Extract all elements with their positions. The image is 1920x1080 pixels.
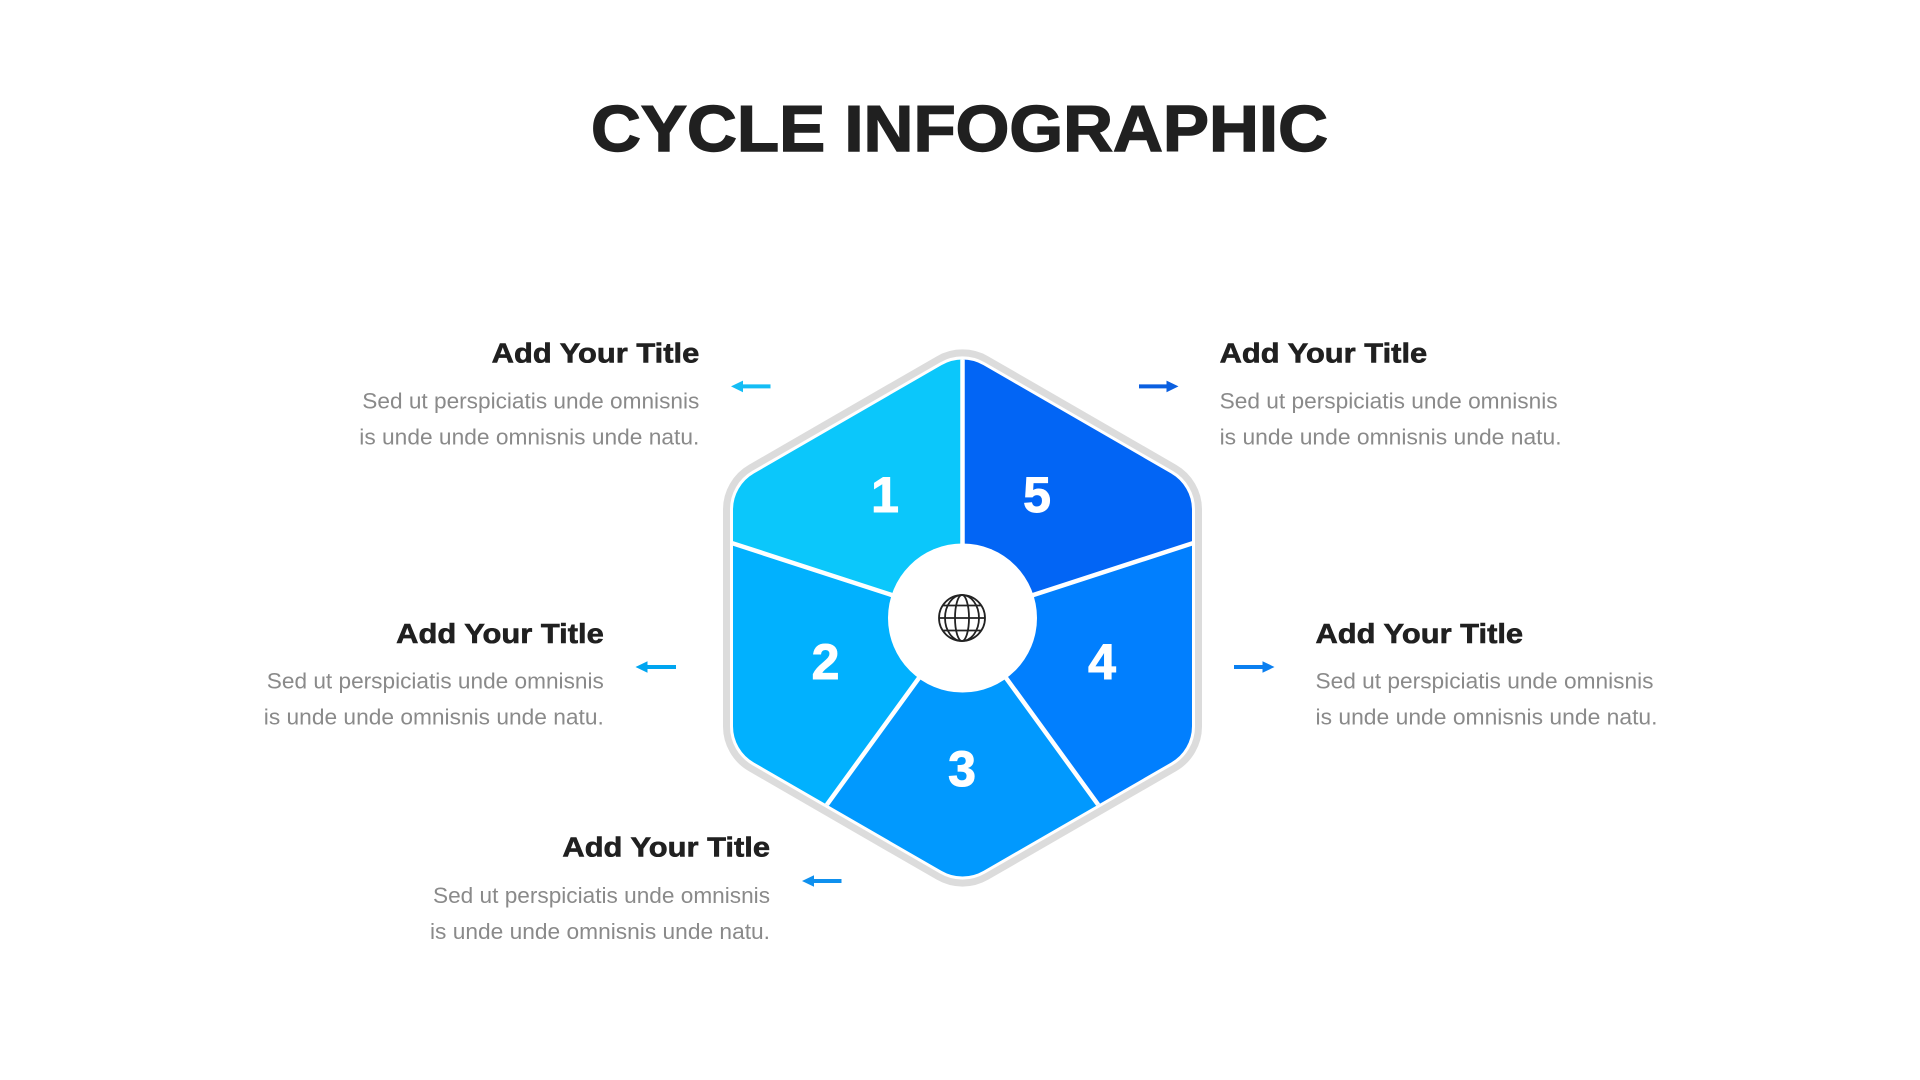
text block 1 <box>359 338 699 449</box>
description 3: is unde unde omnisnis unde natu. <box>430 919 770 944</box>
description 4: Sed ut perspiciatis unde omnisnis <box>1316 669 1654 694</box>
arrow 5 <box>1139 381 1178 392</box>
segments <box>733 360 1192 876</box>
arrow 2 <box>636 661 676 673</box>
description 2 <box>264 669 604 730</box>
description 4 <box>1316 669 1658 730</box>
description 4: is unde unde omnisnis unde natu. <box>1316 705 1658 730</box>
description 3: Sed ut perspiciatis unde omnisnis <box>433 883 770 908</box>
segment 2 <box>733 546 917 805</box>
description 3 <box>430 883 770 944</box>
heading 1: Add Your Title <box>492 338 699 369</box>
text block 3 <box>430 832 770 944</box>
number 2: 2 <box>812 634 839 690</box>
heading 4: Add Your Title <box>1316 618 1523 649</box>
segment 1 <box>733 360 962 593</box>
segment 4 <box>1008 546 1192 805</box>
text block 4 <box>1316 618 1658 730</box>
heading 5: Add Your Title <box>1220 338 1427 369</box>
description 1: is unde unde omnisnis unde natu. <box>359 424 699 449</box>
arrow 1 <box>731 381 770 392</box>
arrow 4 <box>1234 661 1274 673</box>
arrow 3 <box>802 875 842 887</box>
description 2: is unde unde omnisnis unde natu. <box>264 705 604 730</box>
segment 5 <box>963 360 1192 593</box>
hexagon outline <box>726 353 1198 883</box>
description 1: Sed ut perspiciatis unde omnisnis <box>362 388 699 413</box>
heading 3: Add Your Title <box>562 832 770 863</box>
title: CYCLE INFOGRAPHIC <box>591 92 1328 165</box>
description 2: Sed ut perspiciatis unde omnisnis <box>267 669 604 694</box>
description 5 <box>1220 388 1562 449</box>
center circle <box>888 544 1037 692</box>
text block 5 <box>1220 338 1562 449</box>
cycle diagram: hexagon <box>723 350 1202 886</box>
number 3: 3 <box>948 741 976 797</box>
segment 3 <box>826 680 1098 876</box>
number 1: 1 <box>871 467 899 523</box>
description 5: Sed ut perspiciatis unde omnisnis <box>1220 388 1558 413</box>
number 5: 5 <box>1023 467 1051 523</box>
heading 2: Add Your Title <box>396 618 604 649</box>
number 4: 4 <box>1088 634 1116 690</box>
text block 2 <box>264 618 604 730</box>
icon: globe <box>939 595 985 641</box>
description 5: is unde unde omnisnis unde natu. <box>1220 424 1562 449</box>
description 1 <box>359 388 699 449</box>
